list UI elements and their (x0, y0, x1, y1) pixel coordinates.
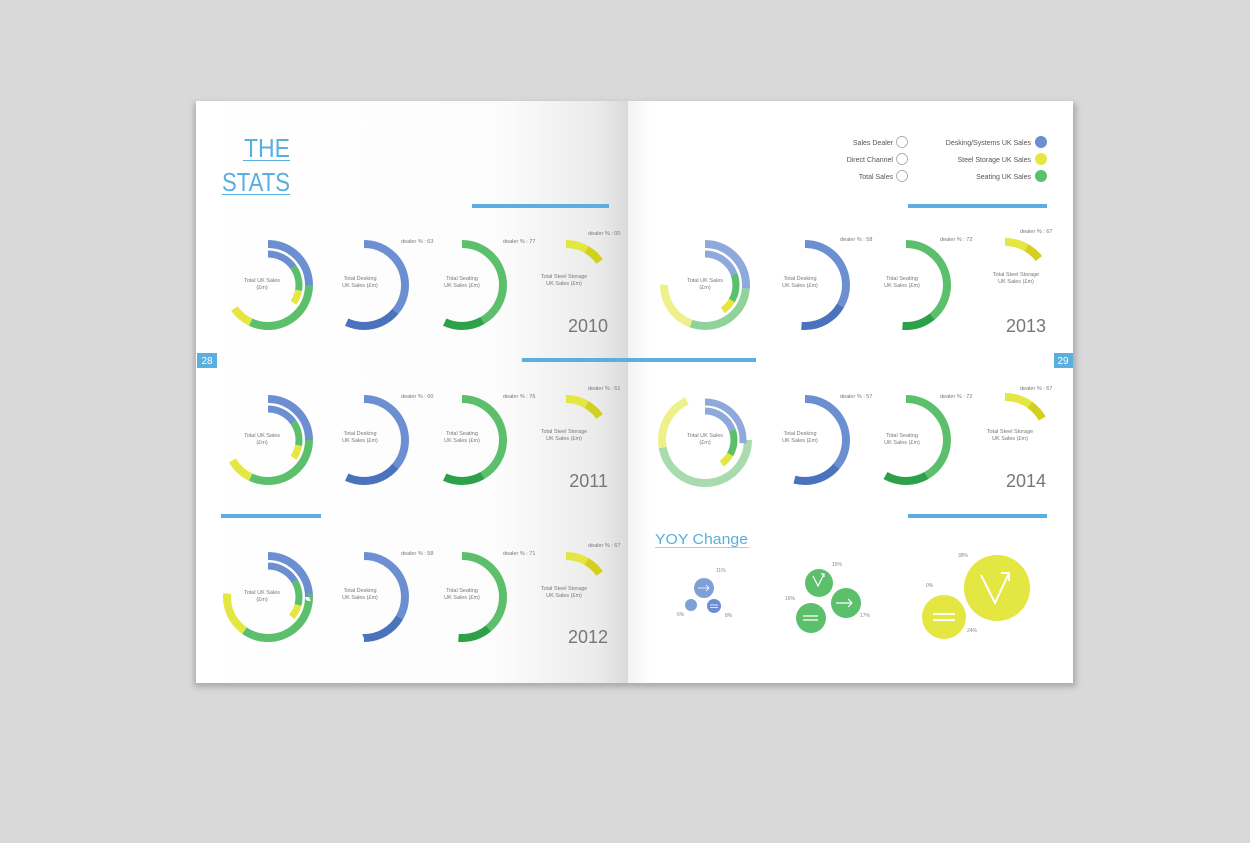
chart: total UK 2014 (662, 397, 748, 483)
YOY bubbles: seating (785, 562, 871, 633)
title (222, 133, 290, 197)
chart labels: UK Sales (£m) (998, 279, 1034, 285)
chart labels: Total Desking (783, 431, 817, 437)
page number 29: 29 (1057, 356, 1069, 367)
chart labels: UK Sales (£m) (782, 438, 818, 444)
YOY bubbles: storage (922, 553, 1030, 639)
YOY bubbles: desking: 8% (725, 613, 733, 619)
chart labels: Total Steel Storage (987, 429, 1033, 435)
dealer % labels: dealer % : 76 (503, 394, 535, 400)
chart labels: (£m) (256, 285, 268, 291)
chart labels: Total UK Sales (244, 590, 280, 596)
chart labels: Total Desking (343, 276, 377, 282)
dealer % labels: dealer % : 72 (940, 237, 972, 243)
page number 29 (1054, 353, 1073, 368)
YOY bubbles: seating: 16% (785, 596, 796, 602)
chart labels: UK Sales (£m) (444, 595, 480, 601)
chart labels: Total Steel Storage (541, 586, 587, 592)
chart: total UK 2012 (227, 556, 309, 638)
chart labels: (£m) (699, 440, 711, 446)
years: 2013 (1006, 316, 1046, 336)
YOY bubbles: desking: 6% (677, 612, 685, 618)
chart labels: Total Steel Storage (993, 272, 1039, 278)
YOY bubbles: storage: 24% (967, 628, 978, 634)
years: 2014 (1006, 471, 1046, 491)
legend (847, 136, 1047, 182)
years: 2010 (568, 316, 608, 336)
legend: Steel Storage UK Sales (957, 157, 1031, 164)
legend: Sales Dealer (853, 140, 894, 147)
YOY bubbles: seating: 15% (832, 562, 843, 568)
chart labels: (£m) (256, 440, 268, 446)
chart labels: Total UK Sales (687, 278, 723, 284)
chart labels: Total Seating (446, 588, 478, 594)
chart labels: Total Desking (343, 588, 377, 594)
legend: Seating UK Sales (976, 174, 1031, 181)
chart labels: UK Sales (£m) (884, 283, 920, 289)
chart labels: UK Sales (£m) (444, 438, 480, 444)
chart labels: UK Sales (£m) (342, 283, 378, 289)
chart labels: UK Sales (£m) (546, 436, 582, 442)
YOY bubbles: desking (677, 568, 733, 619)
dealer % labels: dealer % : 58 (840, 237, 872, 243)
chart labels: UK Sales (£m) (546, 281, 582, 287)
chart labels: Total Seating (446, 431, 478, 437)
YOY bubbles: desking: 11% (716, 568, 726, 574)
chart labels: UK Sales (£m) (444, 283, 480, 289)
dealer % labels: dealer % : 60 (401, 394, 433, 400)
title: STATS (222, 167, 290, 197)
title: THE (244, 133, 290, 163)
legend: Desking/Systems UK Sales (946, 140, 1031, 147)
chart labels: Total UK Sales (687, 433, 723, 439)
chart labels: Total Seating (446, 276, 478, 282)
dealer % labels: dealer % : 67 (1020, 386, 1052, 392)
YOY change heading: YOY Change (655, 531, 748, 548)
chart labels: (£m) (699, 285, 711, 291)
chart labels: Total UK Sales (244, 278, 280, 284)
dealer % labels: dealer % : 57 (840, 394, 872, 400)
dealer % labels: dealer % : 58 (401, 551, 433, 557)
chart: total UK 2010 (227, 244, 309, 326)
years: 2011 (569, 471, 608, 491)
dealer % labels: dealer % : 63 (401, 239, 433, 245)
YOY bubbles: storage: 38% (958, 553, 969, 559)
dealer % labels: dealer % : 00 (588, 231, 620, 237)
YOY bubbles: seating: 17% (860, 613, 871, 619)
page number 28: 28 (201, 356, 213, 367)
dealer % labels: dealer % : 67 (1020, 229, 1052, 235)
blue bars (221, 204, 1047, 518)
chart labels: UK Sales (£m) (992, 436, 1028, 442)
panel: left page (196, 101, 628, 683)
dealer % labels: dealer % : 72 (940, 394, 972, 400)
years (568, 316, 1046, 647)
chart labels: Total Steel Storage (541, 429, 587, 435)
years: 2012 (568, 627, 608, 647)
chart labels: Total Seating (886, 276, 918, 282)
chart labels: Total Desking (783, 276, 817, 282)
book shadow (194, 103, 1076, 687)
chart labels: Total UK Sales (244, 433, 280, 439)
page number 28 (197, 353, 217, 368)
dealer % labels (401, 229, 1052, 557)
chart labels: Total Desking (343, 431, 377, 437)
charts: desking / seating / steel (323, 242, 1048, 638)
chart labels: Total Seating (886, 433, 918, 439)
dealer % labels: dealer % : 67 (588, 543, 620, 549)
chart: total UK 2013 (664, 244, 746, 326)
chart labels: UK Sales (£m) (782, 283, 818, 289)
chart: total UK 2011 (227, 399, 309, 481)
YOY bubbles: storage: 0% (926, 583, 934, 589)
chart labels (244, 272, 1039, 603)
chart labels: UK Sales (£m) (342, 595, 378, 601)
chart labels: UK Sales (£m) (884, 440, 920, 446)
chart labels: UK Sales (£m) (342, 438, 378, 444)
panel: right page (628, 101, 1073, 683)
chart labels: Total Steel Storage (541, 274, 587, 280)
dealer % labels: dealer % : 77 (503, 239, 535, 245)
chart labels: UK Sales (£m) (546, 593, 582, 599)
chart labels: (£m) (256, 597, 268, 603)
dealer % labels: dealer % : 61 (588, 386, 620, 392)
dealer % labels: dealer % : 71 (503, 551, 535, 557)
legend: Direct Channel (847, 157, 893, 164)
legend: Total Sales (859, 174, 893, 181)
